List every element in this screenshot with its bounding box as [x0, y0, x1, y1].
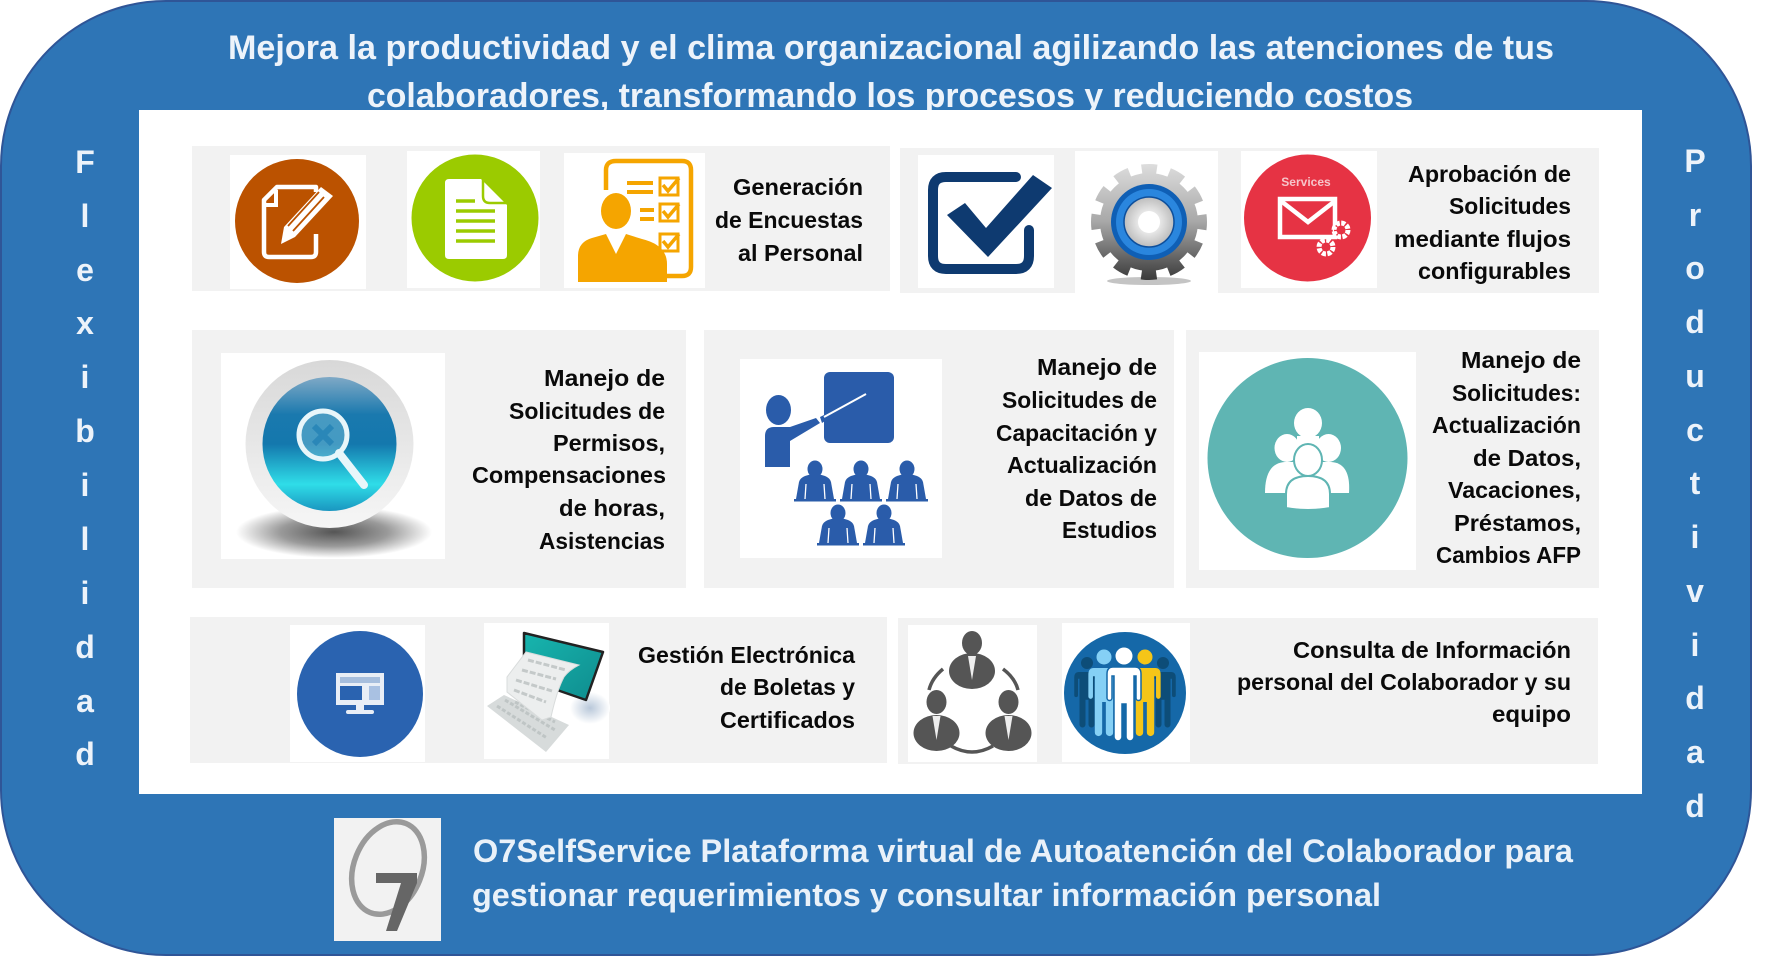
text: Manejo de Solicitudes de Permisos: Solicitudes de	[509, 398, 665, 424]
icon: edit note	[230, 155, 366, 289]
text: Manejo de Solicitudes de Permisos: de horas,	[559, 495, 665, 521]
vertical label: Productividad: r	[1689, 197, 1701, 233]
icon: person checklist	[564, 153, 705, 288]
vertical label: Productividad: o	[1685, 250, 1705, 286]
text: Manejo de Solicitudes Actualización: Actualización	[1432, 412, 1581, 438]
text: Manejo de Solicitudes Actualización	[1432, 347, 1581, 568]
text: Consulta de Información: Consulta de Información	[1293, 637, 1571, 663]
vertical label: Productividad: d	[1685, 304, 1705, 340]
text: Gestión Electrónica: Certificados	[720, 707, 855, 733]
vertical label: Flexibilidad: d	[75, 629, 95, 665]
vertical label: Productividad: t	[1690, 465, 1701, 501]
footer text: gestionar requerimientos y consultar información personal	[472, 877, 1381, 913]
title: Mejora la productividad y el clima organizacional agilizando las atenciones de tus	[228, 29, 1554, 67]
icon: monitor	[290, 625, 425, 762]
text: Manejo de Solicitudes de Capacitación	[996, 354, 1157, 543]
vertical label: Flexibilidad: d	[75, 736, 95, 772]
panel: actualización de datos	[1186, 330, 1599, 588]
text: Manejo de Solicitudes de Permisos: Asistencias	[539, 528, 665, 554]
panel: encuestas	[192, 146, 890, 291]
text: Manejo de Solicitudes Actualización: Vacaciones,	[1448, 477, 1581, 503]
footer text	[472, 833, 1573, 913]
text: Manejo de Solicitudes Actualización: Cambios AFP	[1436, 542, 1581, 568]
title	[228, 29, 1554, 115]
vertical label: Flexibilidad: e	[76, 252, 94, 288]
text: Manejo de Solicitudes Actualización: Préstamos,	[1454, 510, 1581, 536]
vertical label: Productividad: v	[1686, 573, 1704, 609]
vertical label: Flexibilidad: l	[81, 521, 89, 557]
text: Gestión Electrónica	[638, 642, 856, 733]
panel: permisos	[192, 330, 686, 588]
vertical label: Productividad: i	[1691, 627, 1699, 663]
text: Manejo de Solicitudes de Permisos: Compensaciones	[472, 462, 666, 488]
vertical label: Productividad: u	[1685, 358, 1705, 394]
text: Manejo de Solicitudes de Permisos: Permisos,	[553, 430, 665, 456]
icon: receipt on laptop	[484, 623, 610, 759]
text: Gestión Electrónica: Gestión Electrónica	[638, 642, 856, 668]
text: Aprobación de Solicitudes: Solicitudes	[1449, 193, 1571, 219]
text: Generación de Encuestas al Personal: Generación	[733, 174, 863, 200]
text: Aprobación de Solicitudes: configurables	[1418, 258, 1571, 284]
vertical label: Flexibilidad: i	[81, 575, 89, 611]
text: Consulta de Información	[1237, 637, 1571, 727]
text: Generación de Encuestas al Personal	[715, 174, 863, 266]
icon: checkbox	[918, 155, 1054, 288]
vertical label: Flexibilidad: F	[75, 144, 95, 180]
text: Manejo de Solicitudes de Permisos	[472, 365, 666, 554]
text: Manejo de Solicitudes de Capacitación: de Datos de	[1025, 485, 1157, 511]
text: Aprobación de Solicitudes: Aprobación de	[1408, 161, 1571, 187]
panel: aprobación	[900, 148, 1599, 293]
text: Manejo de Solicitudes Actualización: de Datos,	[1473, 445, 1581, 471]
text: Generación de Encuestas al Personal: de Encuestas	[715, 207, 863, 233]
vertical label: Flexibilidad: b	[75, 413, 95, 449]
text: Manejo de Solicitudes de Capacitación: Actualización	[1007, 452, 1157, 478]
vertical label: Flexibilidad: i	[81, 467, 89, 503]
vertical label: Flexibilidad: i	[81, 359, 89, 395]
white content panel	[139, 110, 1642, 794]
vertical label: Flexibilidad	[75, 144, 95, 772]
vertical label: Productividad: d	[1685, 788, 1705, 824]
text: Manejo de Solicitudes de Capacitación: Manejo de	[1037, 354, 1157, 380]
icon: gear	[1075, 151, 1218, 293]
vertical label: Flexibilidad: a	[76, 683, 94, 719]
text: Manejo de Solicitudes de Capacitación: Estudios	[1062, 517, 1157, 543]
icon: blue team circle	[1062, 623, 1190, 762]
text: Manejo de Solicitudes de Permisos: Manejo de	[544, 365, 665, 391]
icon: services mail	[1241, 151, 1377, 288]
text: Generación de Encuestas al Personal: al Personal	[738, 240, 863, 266]
footer text: O7SelfService Plataforma virtual de Autoatención del Colaborador para	[473, 833, 1573, 869]
panel: capacitación	[704, 330, 1174, 588]
text: Manejo de Solicitudes de Capacitación: Capacitación y	[996, 420, 1157, 446]
panel: boletas	[190, 617, 887, 763]
text: Manejo de Solicitudes Actualización: Manejo de	[1461, 347, 1581, 373]
text: Consulta de Información: personal del Colaborador y su	[1237, 669, 1571, 695]
icon: three executives	[908, 625, 1037, 762]
text: Aprobación de Solicitudes: mediante flujos	[1394, 226, 1571, 252]
vertical label: Productividad: i	[1691, 519, 1699, 555]
icon: magnifier button	[221, 353, 445, 559]
icon: teal people group	[1199, 352, 1416, 570]
vertical label: Productividad: d	[1685, 680, 1705, 716]
text: Gestión Electrónica: de Boletas y	[720, 674, 855, 700]
text: Aprobación de Solicitudes	[1394, 161, 1571, 284]
vertical label: Flexibilidad: x	[76, 305, 94, 341]
title: colaboradores, transformando los procesos y reduciendo costos	[367, 77, 1413, 115]
vertical label: Productividad: a	[1686, 734, 1704, 770]
icon: services mail: Services	[1281, 175, 1331, 189]
icon: document	[407, 151, 540, 288]
panel: consulta	[898, 618, 1598, 764]
text: Manejo de Solicitudes de Capacitación: Solicitudes de	[1002, 387, 1157, 413]
vertical label: Productividad: P	[1684, 143, 1706, 179]
text: Manejo de Solicitudes Actualización: Solicitudes:	[1452, 380, 1581, 406]
vertical label: Productividad: c	[1686, 412, 1704, 448]
text: Consulta de Información: equipo	[1492, 701, 1571, 727]
icon: training class	[740, 359, 942, 558]
vertical label: Flexibilidad: l	[81, 198, 89, 234]
vertical label: Productividad	[1684, 143, 1706, 824]
logo: O7	[334, 811, 441, 941]
